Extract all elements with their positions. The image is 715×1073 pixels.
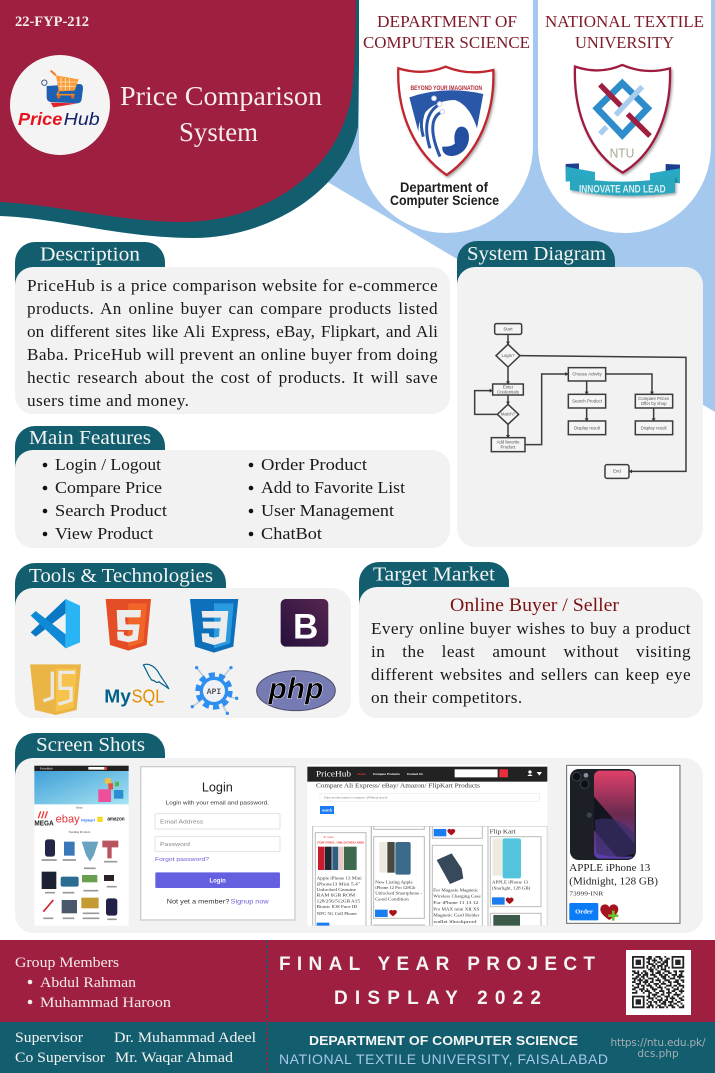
icon: department shield: BEYOND YOUR IMAGINATION [410, 85, 482, 92]
logo: PriceHub: Hub [64, 109, 100, 129]
text block: description: products. An online buyer can compare products listed [27, 299, 438, 318]
flowchart: Match? [501, 412, 516, 417]
panel: description [15, 267, 450, 414]
screenshot: home page: Flipkart [81, 817, 96, 822]
features list: Login / Logout [55, 455, 161, 474]
screenshot: login form: Password [160, 842, 190, 848]
project code: 22-FYP-212 [15, 14, 89, 30]
product columns: (Starlight, 128 GB) [492, 885, 531, 891]
screenshot: home page: Trending Products [68, 830, 91, 834]
screenshot: product card: (Midnight, 128 GB) [569, 877, 658, 888]
text block: target market: Every online buyer wishes to buy a product [371, 619, 691, 638]
logo: PriceHub [10, 55, 110, 155]
banner: final year project display [279, 954, 595, 1009]
footer: teal band [0, 1022, 715, 1073]
supervisors: Mr. Waqar Ahmad [115, 1050, 234, 1066]
header blob: crimson [0, 0, 356, 222]
panel: target market [359, 587, 703, 718]
heading: university: NATIONAL TEXTILE [545, 12, 704, 31]
text block: description: users time and money. [27, 391, 189, 410]
website url: https://ntu.edu.pk/ [610, 1037, 706, 1049]
screenshot: compare products: Home [358, 772, 366, 776]
flowchart: Enter [503, 384, 514, 389]
icon: bootstrap: B [293, 607, 318, 646]
product columns: Good Condition [375, 897, 410, 902]
heading: university [545, 12, 704, 52]
text block: description: Baba. PriceHub will prevent an online buyer from doing [27, 345, 438, 364]
product columns: NFC 5G Cell Phone [317, 911, 357, 916]
icon: php [257, 671, 335, 711]
heading: university: UNIVERSITY [575, 33, 674, 52]
text block: target market [371, 619, 691, 707]
product columns: RAM 6GB ROM [317, 893, 355, 898]
flowchart: Search Product [572, 398, 603, 403]
icon: blue price tag [47, 84, 83, 103]
supervisors [15, 1030, 256, 1066]
icon: NTU shield: INNOVATE AND LEAD [579, 184, 666, 196]
screenshot: compare products: search [322, 808, 332, 812]
screenshot: home page: PriceHub [40, 766, 53, 770]
icon: css3 [190, 599, 238, 653]
flowchart: End [613, 469, 621, 474]
features list: Compare Price [55, 478, 162, 497]
features list [43, 455, 405, 543]
section: target market: Target Market [373, 564, 495, 586]
product columns: Bionic IOS Face ID [317, 904, 357, 909]
icon: mysql: My [104, 685, 132, 706]
product columns: 128/256/512GB A15 [317, 898, 360, 903]
screenshot: compare products [307, 764, 547, 928]
product columns: Unlocked Smartphone - [375, 891, 423, 896]
product columns: iPhone13 Mini 5.4" [317, 881, 360, 886]
department and university footer: NATIONAL TEXTILE UNIVERSITY, FAISALABAD [279, 1051, 608, 1067]
flowchart: Display result [574, 425, 601, 430]
icon: php: php [267, 672, 323, 705]
screenshot: home page: MEGA [34, 818, 54, 827]
screenshot: login form: Not yet a member? [167, 900, 230, 906]
product columns: wallet Shockproof [433, 919, 477, 924]
icon: vs code [31, 599, 80, 648]
product columns: Pro MAX mini XR XS [433, 906, 480, 911]
panel: national textile university [538, 0, 711, 233]
technology icons [30, 599, 335, 715]
screenshot: login form: Forgot password? [155, 857, 209, 863]
icon: bootstrap [281, 599, 328, 647]
screenshot: home page: ebay [56, 814, 80, 826]
icon: javascript [30, 664, 81, 715]
product columns [313, 820, 547, 928]
text block: description: on different sites like Ali Express, eBay, Flipkart, and Ali [27, 322, 438, 341]
supervisors: Supervisor [15, 1030, 83, 1046]
product columns: Unlocked Genuine [317, 887, 356, 892]
icon: mysql [104, 664, 169, 706]
qr code [626, 950, 691, 1015]
product columns: For iPhone 11 13 12 [433, 900, 478, 905]
banner: final year project display: FINAL YEAR PROJECT [279, 954, 595, 975]
product columns: Fi more [324, 835, 334, 839]
group members [15, 955, 172, 1011]
section: tools and technologies [15, 563, 351, 718]
icon: NTU shield: NTU [610, 146, 634, 160]
section: system diagram: System Diagram [467, 243, 606, 265]
product columns: Apple iPhone 13 Mini [317, 876, 363, 881]
product columns: Wireless Charging Case [433, 894, 481, 899]
icon: html5 [106, 599, 151, 651]
screenshot: product card: Order [575, 908, 593, 915]
header blob: teal backing [0, 0, 360, 238]
group members: Group Members [15, 955, 119, 971]
screenshot: compare products: Contact Us [407, 772, 423, 776]
text block: description [27, 276, 438, 410]
logo wordmark: Price [18, 109, 63, 129]
supervisors: Co Supervisor [15, 1050, 105, 1066]
screenshot: compare products: Enter product name to compare : (Without space) [324, 795, 387, 799]
features list: ChatBot [261, 524, 322, 543]
label: department of computer science: Department of [400, 180, 488, 195]
product columns: Flip Kart [490, 829, 516, 836]
screenshot: login form: Login [202, 780, 233, 794]
text block: description: PriceHub is a price comparison website for e-commerce [27, 276, 438, 295]
department and university footer [279, 1033, 608, 1067]
product columns: For Magsafe Magnetic [433, 887, 478, 892]
features list: Search Product [55, 501, 167, 520]
heading: department: COMPUTER SCIENCE [363, 33, 530, 52]
white wedge below panel [457, 259, 715, 440]
screenshot: product card: APPLE iPhone 13 [569, 863, 650, 874]
panel: tools [15, 588, 351, 718]
features list: Order Product [261, 455, 367, 474]
website url: dcs.php [637, 1048, 679, 1060]
screenshot: home page [34, 765, 129, 926]
website url [610, 1037, 706, 1060]
features list: View Product [55, 524, 153, 543]
screenshot: login form: Email Address [160, 819, 204, 825]
tab: target market [359, 562, 509, 605]
screenshot: login form: Login with your email and password. [166, 800, 269, 806]
text block: description: hectic research about the cost of products. It will save [27, 368, 438, 387]
section: main features [15, 426, 450, 548]
screenshot: home page: amazon [107, 817, 125, 823]
icon: api gear: API [207, 688, 221, 697]
supervisors: Dr. Muhammad Adeel [114, 1030, 256, 1046]
icon: department shield [398, 67, 493, 175]
title [120, 81, 323, 147]
screenshot: login form [141, 767, 295, 920]
group members: Muhammad Haroon [40, 995, 172, 1011]
flowchart: Add favorite [496, 440, 520, 445]
flowchart: Compare Prices [638, 396, 669, 401]
features list: User Management [261, 501, 394, 520]
section: description: Description [40, 244, 140, 266]
features list: Add to Favorite List [261, 478, 405, 497]
flowchart: Credentials [497, 389, 519, 394]
screenshot: product card: 73999-INR [569, 891, 604, 898]
section: screen shots: Screen Shots [36, 734, 145, 756]
screenshot: home page: Shops [76, 807, 83, 810]
group members: Abdul Rahman [40, 975, 137, 991]
product columns: FOR FREE, UNLOCKED AND [317, 841, 364, 845]
icon: mysql: SQL [132, 685, 164, 706]
product columns: Magnetic Card Holder [433, 913, 480, 918]
flowchart: Product [501, 444, 516, 449]
department and university footer: DEPARTMENT OF COMPUTER SCIENCE [309, 1033, 578, 1048]
panel: features [15, 450, 450, 548]
screenshot: compare products: PriceHub [316, 770, 351, 779]
flowchart: Login? [501, 353, 515, 358]
screenshot: login form: Login [209, 878, 226, 884]
tab: description [15, 242, 165, 285]
tab: screen shots [15, 733, 165, 776]
section: description [15, 242, 450, 414]
panel: screenshots [15, 758, 703, 933]
flowchart [475, 324, 686, 478]
footer: crimson band [0, 940, 715, 1022]
section: tools and technologies: Tools & Technologies [29, 565, 213, 587]
tab: main features [15, 426, 165, 468]
heading: online buyer: Online Buyer / Seller [450, 596, 619, 616]
text block: target market: different websites and sellers can keep eye [371, 665, 691, 684]
title: Price Comparison [120, 81, 323, 111]
background: light blue wedge [326, 0, 715, 412]
screenshot: compare products: Compare Ali Express/ eBay/ Amazon/ FlipKart Products [316, 782, 481, 789]
section: main features: Main Features [29, 427, 151, 449]
icon: shopping cart [51, 71, 56, 75]
product columns: iPhone 12 Pro 128Gb [375, 885, 415, 890]
label: department of computer science: Computer Science [390, 193, 499, 208]
banner: final year project display: DISPLAY 2022 [334, 988, 541, 1009]
section: screen shots [15, 733, 703, 933]
flowchart: Offer by shop [641, 401, 667, 406]
flowchart: Start [503, 327, 513, 332]
icon: NTU shield [566, 65, 680, 196]
screenshot: compare products: Compare Products [373, 772, 400, 776]
heading: department: DEPARTMENT OF [377, 12, 517, 31]
section: system diagram [457, 241, 703, 547]
icon: api gear [191, 666, 238, 715]
text block: target market: in the least amount without visiting [371, 642, 691, 661]
heading: department [363, 12, 530, 52]
section: target market [359, 562, 703, 718]
tab: tools [15, 563, 226, 606]
screenshot: login form: Signup now [231, 900, 269, 906]
flowchart: Display result [641, 425, 667, 430]
title: System [179, 117, 258, 147]
product columns: APPLE iPhone 13 [492, 879, 528, 884]
panel: department of computer science [359, 0, 533, 233]
flowchart: Choose Activity [572, 372, 603, 377]
label: department of computer science [390, 180, 499, 208]
product columns: New Listing Apple [375, 879, 413, 884]
tab: system diagram [457, 241, 615, 285]
text block: target market: on their competitors. [371, 688, 523, 707]
screenshot: product card [567, 765, 680, 923]
panel: diagram [457, 267, 703, 547]
